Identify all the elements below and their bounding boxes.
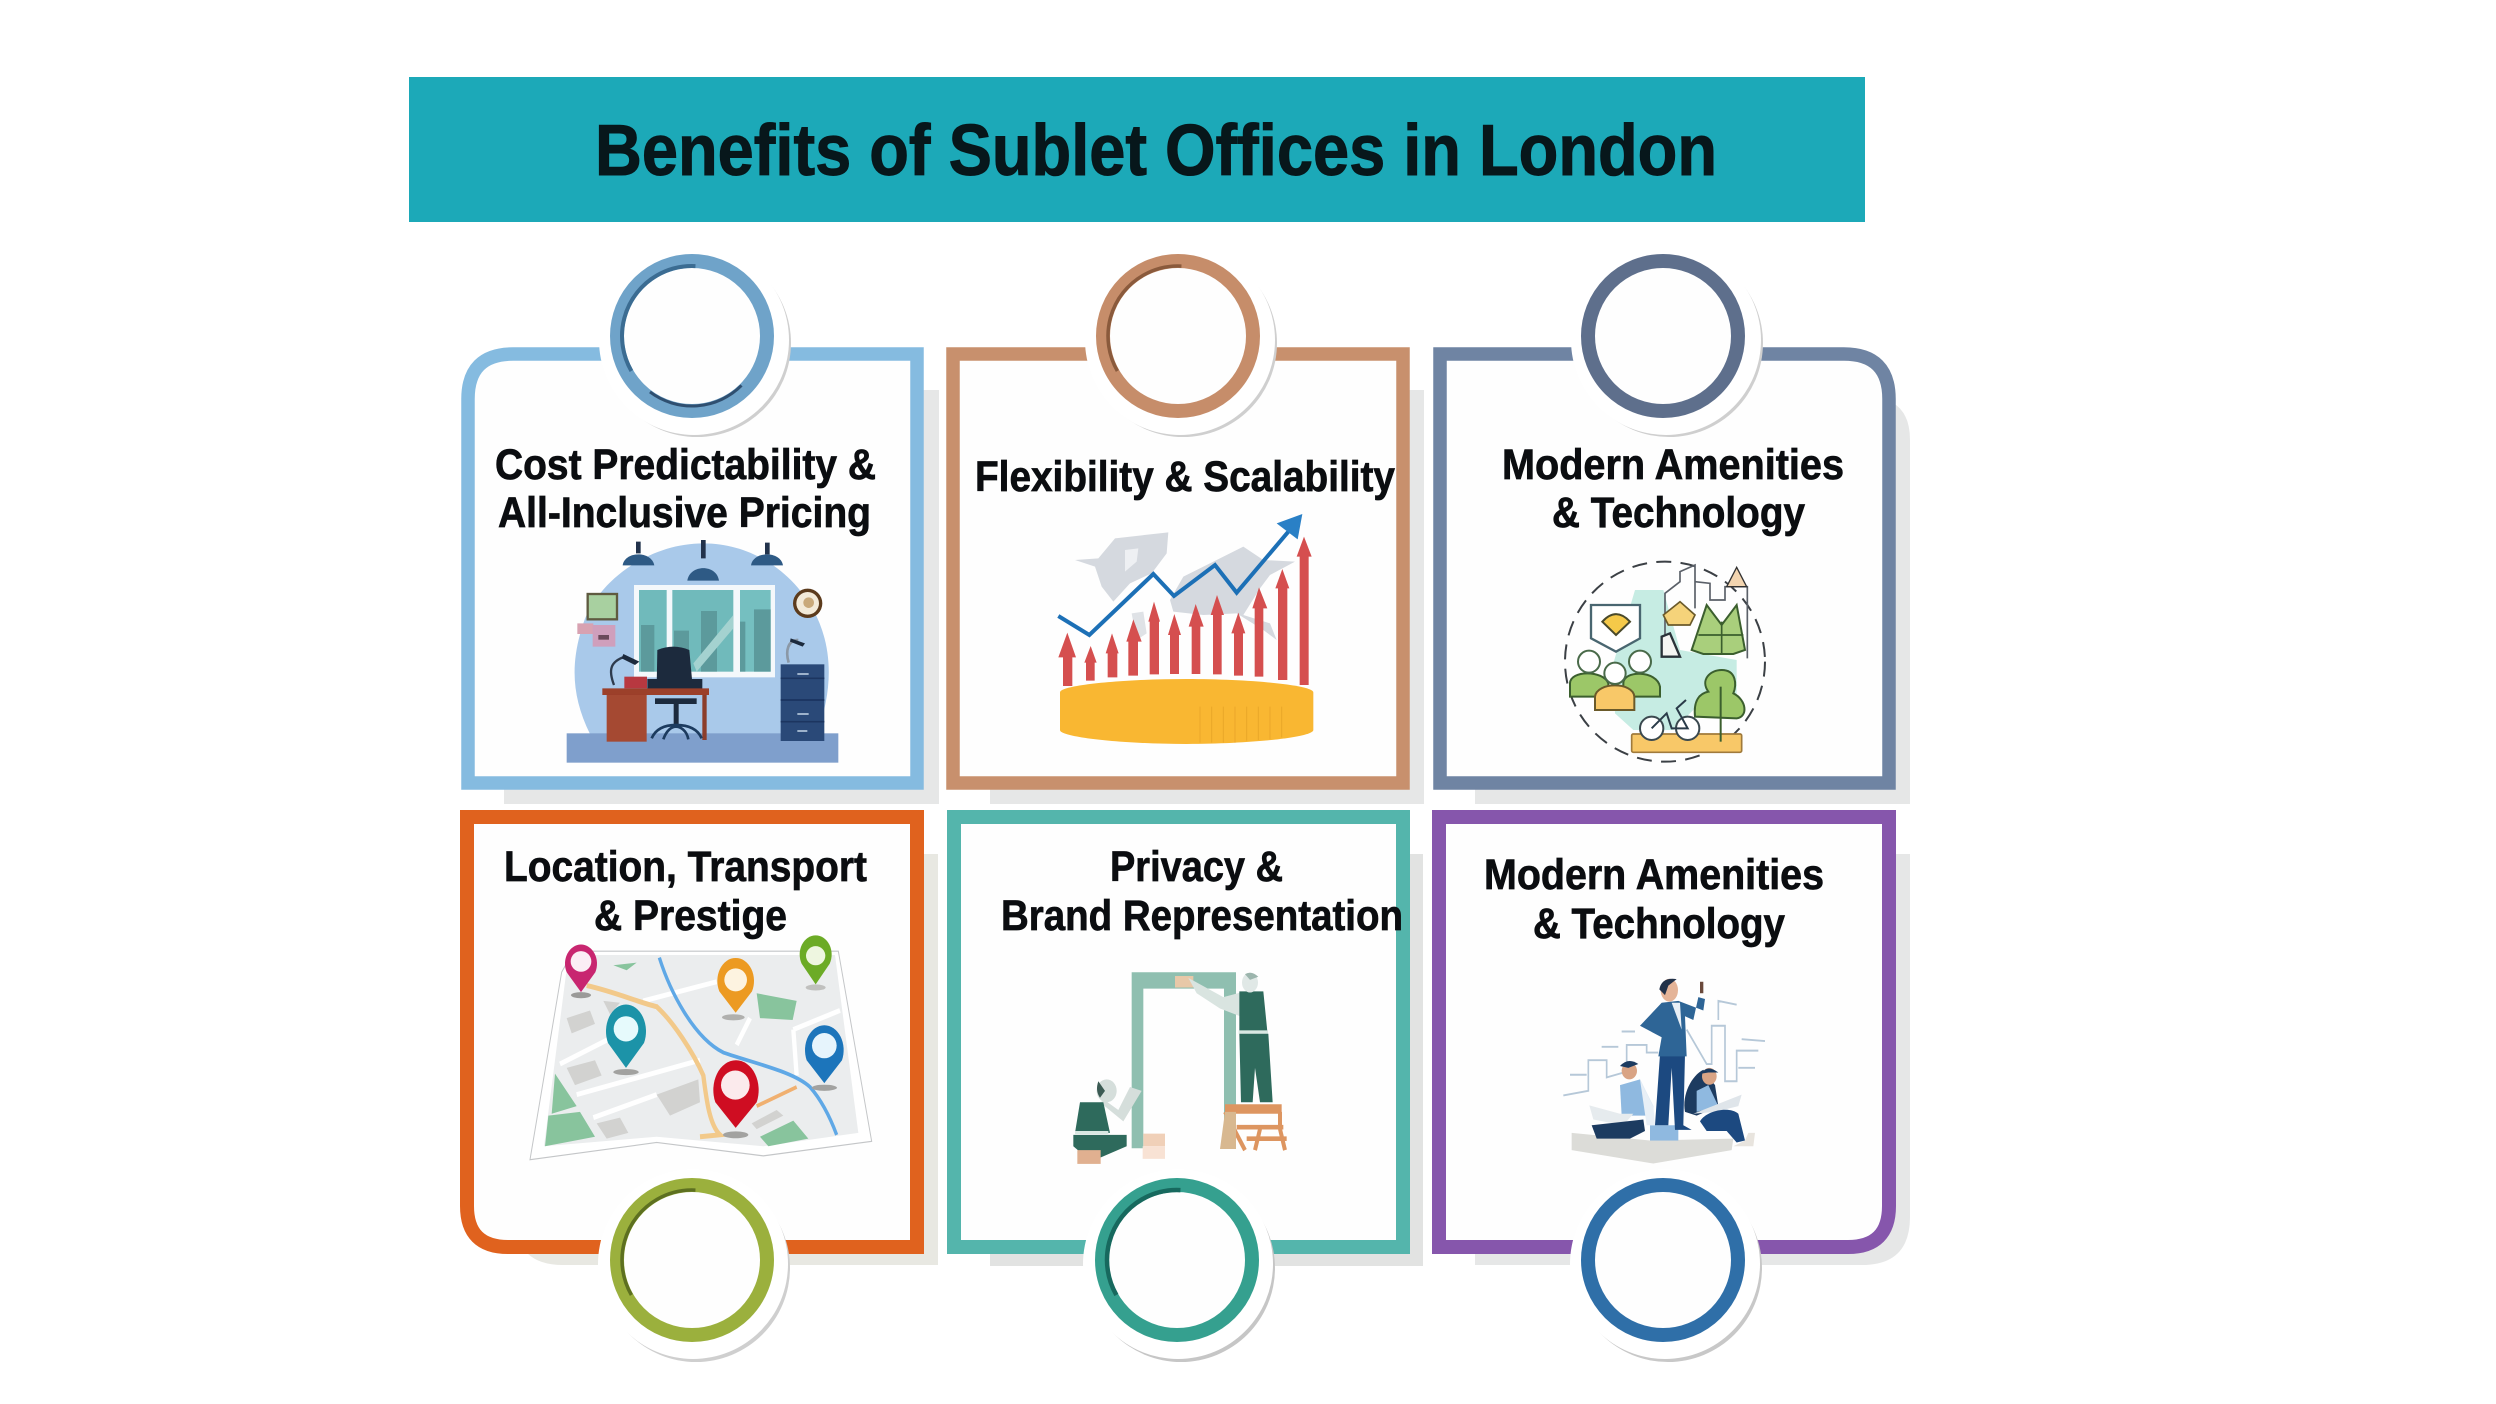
title: privacy: Brand Representation [1001,892,1403,940]
panel: privacy [954,817,1423,1362]
panel: location [467,817,938,1362]
title: cost predictability: All-Inclusive Pricing [498,489,871,537]
panel: flexibility [953,240,1424,804]
icon: office room [567,540,838,763]
title: location: & Prestige [594,892,787,940]
panel: modern amenities top [1440,245,1910,804]
title: flexibility: Flexibility & Scalability [975,453,1395,501]
title: location [504,843,867,940]
icon ring: modern amenities bottom [1570,1169,1762,1362]
panel: cost predictability [468,237,939,804]
panel: modern amenities bottom [1439,817,1910,1362]
icon ring: cost predictability [593,237,791,437]
title: modern amenities top [1502,441,1844,537]
icon: city map with pins [530,935,872,1160]
title: modern amenities bottom: Modern Amenities [1484,851,1824,899]
title: modern amenities top: Modern Amenities [1502,441,1844,489]
icon ring: location [596,1164,790,1362]
icon: community and city [1565,562,1765,762]
title: Benefits of Sublet Offices in London [595,111,1717,191]
title: modern amenities bottom [1484,851,1824,948]
title: privacy: Privacy & [1110,843,1283,891]
icon ring: modern amenities top [1571,245,1763,437]
title banner [409,77,1865,222]
icon ring: privacy [1081,1164,1275,1362]
icon ring: flexibility [1082,240,1277,437]
title: cost predictability: Cost Predictability & [495,441,876,489]
icon: workers fitting door frame [1073,972,1287,1164]
title: cost predictability [495,441,876,537]
icon: team with city skyline [1563,979,1765,1164]
title: location: Location, Transport [504,843,867,891]
title: privacy [1001,843,1403,940]
title: modern amenities bottom: & Technology [1533,900,1785,948]
title: modern amenities top: & Technology [1552,489,1805,537]
icon: growth chart [1058,514,1313,744]
